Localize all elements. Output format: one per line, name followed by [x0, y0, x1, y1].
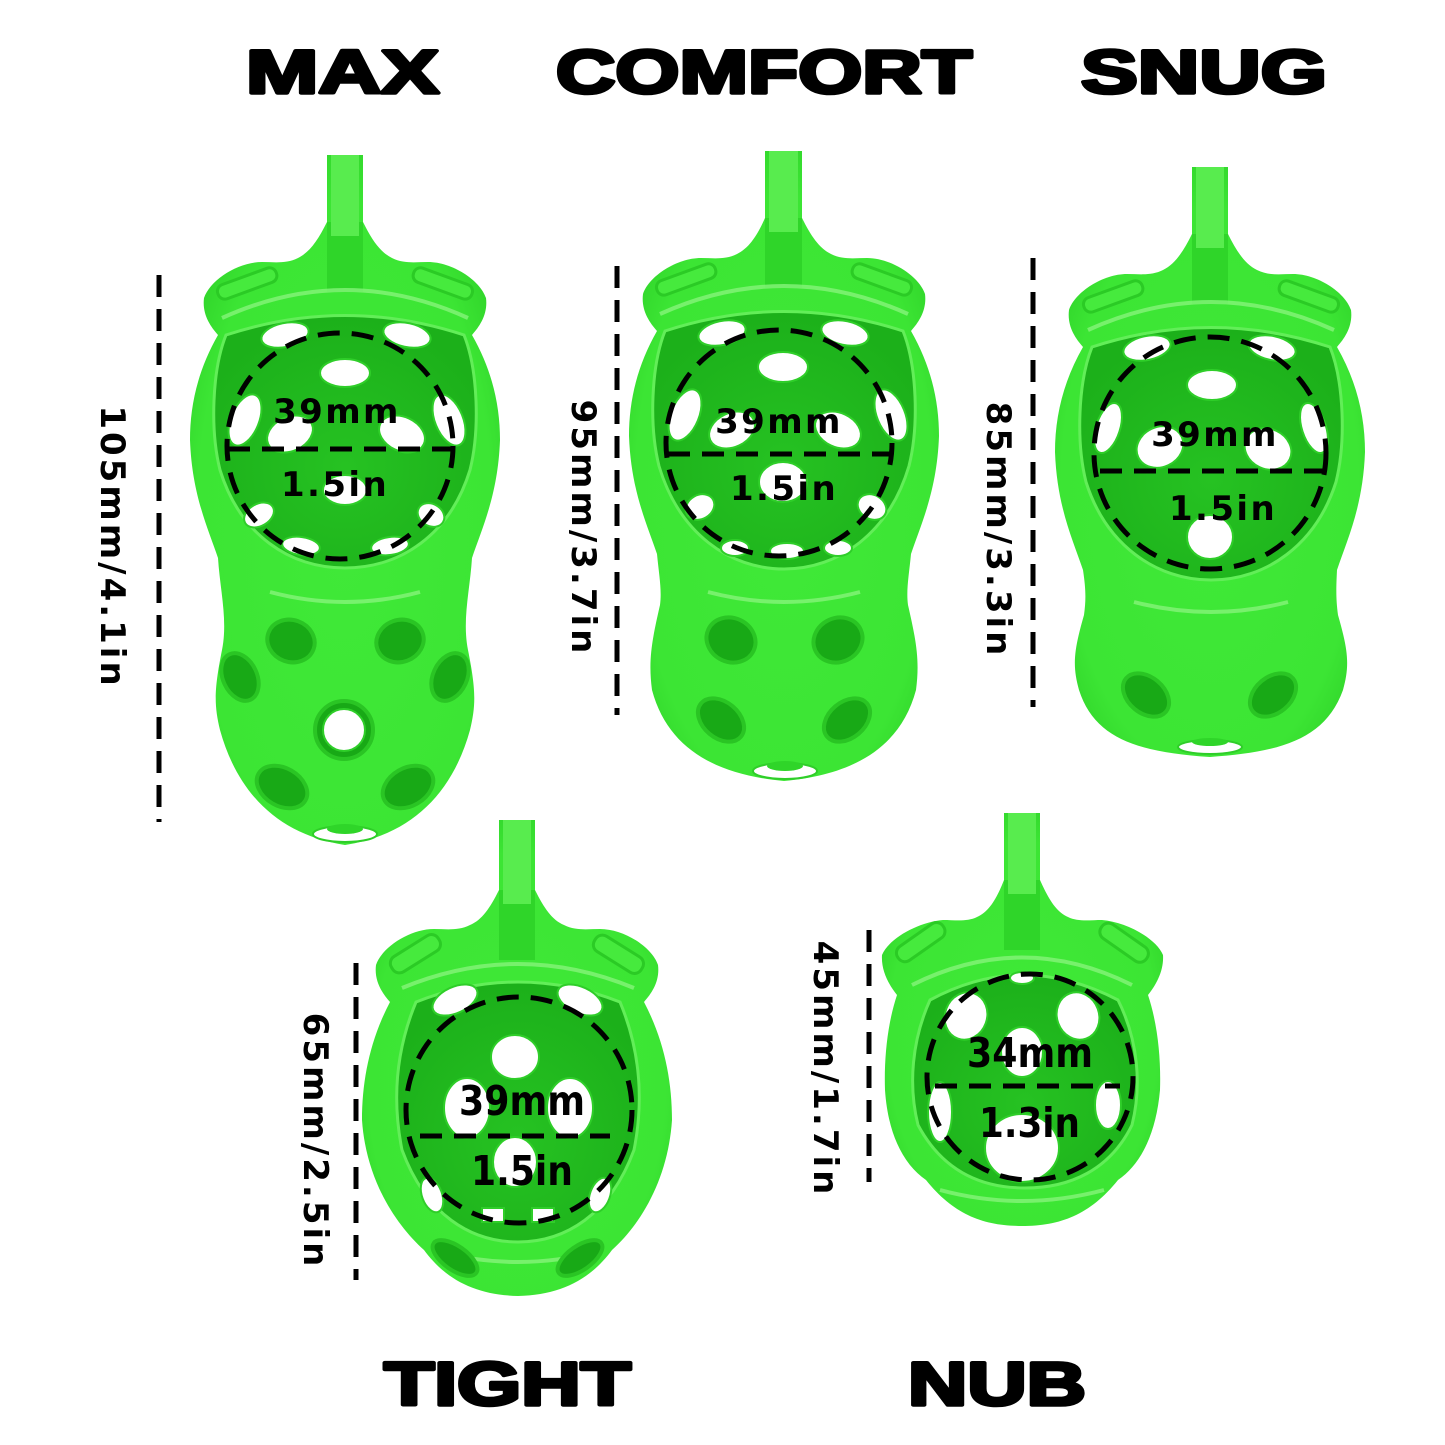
label: 1.3in: 1.3in [979, 1099, 1080, 1147]
holes [416, 978, 616, 1222]
label: 34mm: 34mm [967, 1029, 1093, 1077]
inner diameter circle [227, 333, 453, 559]
title: SNUG: SNUG [1081, 38, 1327, 106]
holes [662, 316, 914, 559]
height bar: MAX [156, 275, 162, 822]
title: MAX: MAX [246, 38, 439, 106]
outer holes [1115, 664, 1304, 754]
label: 39mm: 39mm [1151, 415, 1279, 455]
device: SNUG [1055, 167, 1365, 757]
diameter line [228, 446, 455, 452]
outer holes [690, 609, 878, 779]
height bar: COMFORT [614, 266, 620, 715]
diameter line [420, 1134, 610, 1138]
interior [653, 312, 915, 569]
title: COMFORT: COMFORT [556, 38, 972, 106]
outer holes [427, 1233, 608, 1283]
height bar: TIGHT [354, 963, 358, 1280]
height label: MAX: 105mm/4.1in [92, 405, 132, 689]
device: COMFORT [629, 151, 939, 781]
label: 39mm: 39mm [715, 402, 843, 442]
label: 1.5in: 1.5in [471, 1147, 573, 1195]
label: 39mm: 39mm [459, 1077, 585, 1125]
interior [1080, 328, 1342, 580]
inner diameter circle [666, 330, 892, 556]
inner diameter circle [406, 997, 632, 1223]
interior [913, 975, 1137, 1188]
holes [928, 972, 1121, 1182]
height label: COMFORT: 95mm/3.7in [563, 400, 603, 656]
holes [1089, 331, 1333, 559]
height bar: NUB [866, 930, 872, 1182]
height label: NUB: 45mm/1.7in [805, 941, 845, 1197]
height label: TIGHT: 65mm/2.5in [295, 1013, 335, 1269]
inner diameter circle [1094, 337, 1326, 569]
title: NUB: NUB [908, 1350, 1086, 1418]
diameter line [668, 452, 890, 456]
height bar: SNUG [1030, 258, 1036, 707]
diameter line [935, 1084, 1120, 1088]
interior [214, 316, 476, 568]
label: 1.5in: 1.5in [730, 469, 838, 509]
inner diameter circle [927, 974, 1133, 1180]
label: 1.5in: 1.5in [1169, 489, 1277, 529]
title: TIGHT: TIGHT [384, 1350, 631, 1418]
label: 39mm: 39mm [273, 392, 401, 432]
height label: SNUG: 85mm/3.3in [978, 402, 1018, 658]
interior [397, 982, 639, 1242]
outer holes [214, 613, 476, 842]
holes [222, 318, 472, 558]
device: MAX [190, 155, 500, 845]
device: TIGHT [362, 820, 672, 1296]
label: 1.5in: 1.5in [281, 465, 389, 505]
diameter line [1100, 468, 1325, 474]
device: NUB [882, 813, 1163, 1226]
